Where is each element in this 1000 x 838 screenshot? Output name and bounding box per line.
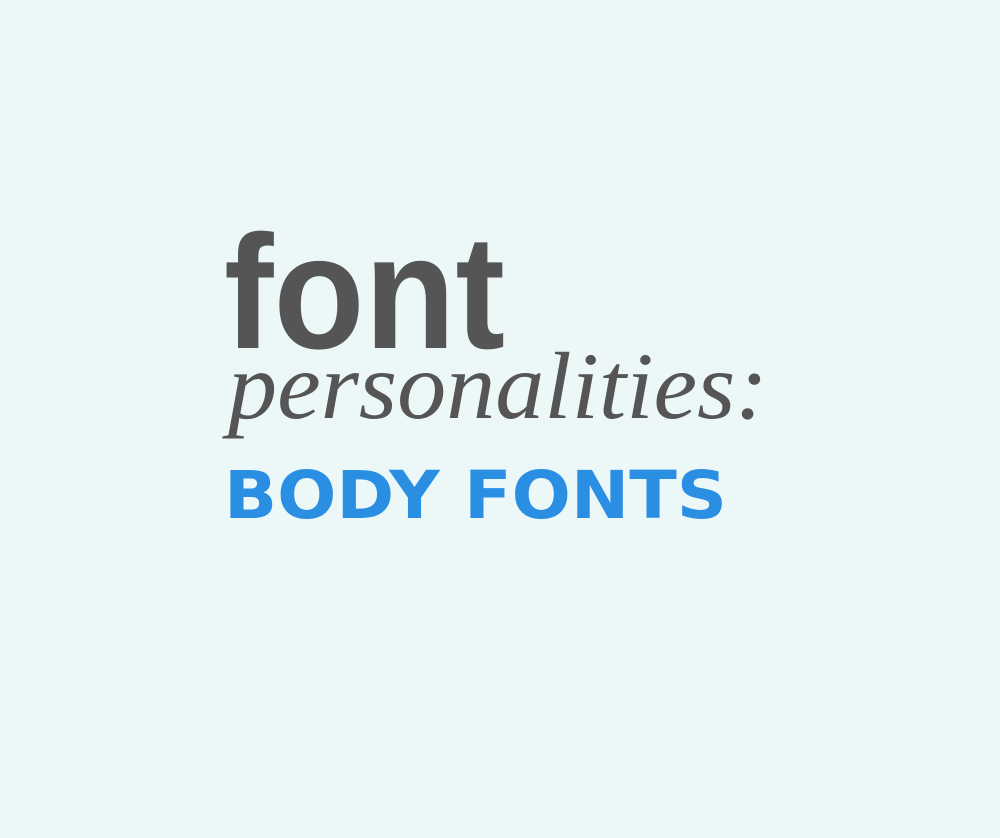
heading: BODY FONTS: BODY FONTS [224, 457, 727, 534]
title: font: font [224, 202, 505, 383]
subtitle: personalities: personalities: [222, 333, 768, 439]
